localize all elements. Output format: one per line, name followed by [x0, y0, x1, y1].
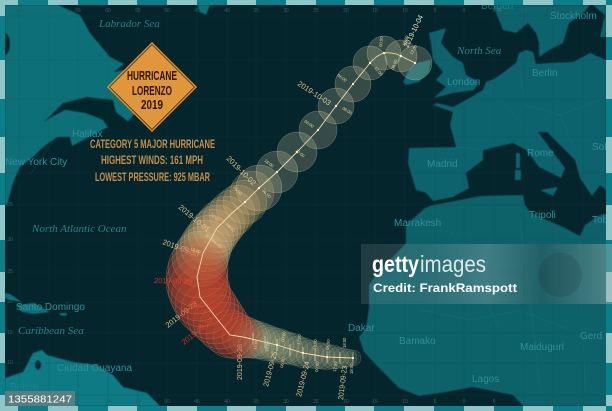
track line — [197, 53, 415, 358]
position time labels: 12:00 — [409, 43, 418, 56]
sea labels: Caribbean Sea — [18, 325, 84, 337]
position time labels: 00:00 — [314, 361, 320, 372]
position time labels: 12:00 — [190, 246, 202, 255]
date labels under circles — [154, 13, 425, 400]
position time labels: 06:00 — [232, 185, 244, 197]
position time labels: 06:00 — [261, 188, 273, 200]
watermark band: images — [420, 251, 486, 277]
warning sign: hurricane name: LORENZO — [132, 83, 172, 98]
city labels: Lagos — [472, 374, 499, 385]
position time labels: 12:00 — [252, 338, 259, 350]
date labels under circles: 2019-10-04 — [402, 13, 425, 49]
sea labels: North Atlantic Ocean — [31, 223, 127, 235]
land: Britain — [429, 28, 479, 98]
position time labels: 12:00 — [296, 334, 302, 345]
image id tag: 1355881247 — [8, 394, 72, 406]
coordinate labels: 40 — [224, 399, 230, 405]
position time labels: 12:00 — [209, 212, 221, 223]
city labels: Dakar — [348, 323, 375, 334]
city labels: Rome — [527, 148, 554, 159]
coordinate labels: 60 — [105, 8, 111, 14]
position time labels: 00:00 — [204, 233, 216, 243]
date labels under circles: 2019-09-27 — [180, 316, 215, 347]
position time labels: 06:00 — [279, 356, 286, 368]
coordinate labels: 20 — [580, 399, 586, 405]
sea labels: North Sea — [456, 45, 502, 57]
position time labels: 06:00 — [390, 58, 399, 70]
coordinate labels: 10 — [521, 399, 527, 405]
position time labels: 18:00 — [401, 34, 410, 46]
watermark band — [361, 244, 612, 304]
storm statistics: LOWEST PRESSURE: 925 MBAR — [95, 172, 210, 184]
date labels under circles: 2019-10-01 — [177, 203, 212, 234]
position time labels: 12:00 — [373, 65, 384, 77]
position time labels: 06:00 — [341, 106, 354, 116]
position time labels: 18:00 — [225, 222, 237, 234]
image id tag — [5, 391, 75, 406]
sea labels: Labrador Sea — [98, 18, 160, 30]
Hudson Bay edge — [0, 33, 10, 55]
position time labels: 00:00 — [378, 36, 384, 47]
coordinate labels: 70 — [46, 8, 52, 14]
storm statistics — [90, 139, 215, 184]
warning sign: hurricane name — [107, 42, 197, 132]
coordinate labels: 35 — [7, 202, 13, 208]
date labels under circles: 2019-10-02 — [225, 154, 258, 187]
storm statistics: HIGHEST WINDS: 161 MPH — [101, 155, 203, 167]
coordinate labels: 25 — [313, 399, 319, 405]
position time labels: 18:00 — [312, 339, 318, 350]
watermark band: getty — [372, 251, 419, 277]
coordinate labels: 0 — [463, 399, 466, 405]
position time labels: 06:00 — [303, 119, 315, 129]
position time labels: 18:00 — [264, 340, 271, 352]
land: Cuba — [5, 293, 22, 302]
track points — [244, 52, 416, 359]
position time labels: 06:00 — [336, 73, 348, 83]
land: North America — [5, 5, 136, 205]
coordinate labels: 45 — [194, 8, 200, 14]
position time labels: 06:00 — [325, 339, 331, 350]
storm statistics: CATEGORY 5 MAJOR HURRICANE — [90, 139, 215, 151]
coordinate labels: 5 — [434, 399, 437, 405]
city labels: Maiduguri — [520, 342, 564, 353]
coordinate labels: 55 — [135, 8, 141, 14]
position time labels: 18:00 — [349, 363, 354, 374]
coordinate labels: 10 — [402, 8, 408, 14]
position time labels: 18:00 — [263, 158, 275, 169]
coordinate labels: 25 — [7, 269, 13, 275]
warning sign: hurricane name: 2019 — [141, 97, 163, 112]
date labels under circles: 2019-09-25 — [261, 350, 279, 388]
coordinate labels: 60 — [105, 399, 111, 405]
city labels: Berlin — [532, 68, 558, 79]
coordinate labels: 45 — [7, 134, 13, 140]
Lake Maracaibo — [35, 360, 41, 370]
warning sign: hurricane name: HURRICANE — [127, 68, 177, 83]
city labels: Gerd — [580, 331, 602, 342]
coordinate labels: 30 — [283, 399, 289, 405]
coordinate labels: 15 — [7, 330, 13, 336]
coordinate labels: 10 — [402, 399, 408, 405]
city labels: London — [447, 77, 480, 88]
coordinate labels: 75 — [16, 8, 22, 14]
coordinate labels: 25 — [313, 8, 319, 14]
city labels: Tripoli — [529, 210, 556, 221]
date labels under circles: 2019-10-03 — [296, 79, 333, 107]
coordinate labels: 10 — [7, 360, 13, 366]
coordinate labels: 40 — [7, 170, 13, 176]
city labels: New York City — [5, 157, 67, 168]
coordinate labels: 30 — [7, 237, 13, 243]
position time labels: 12:00 — [332, 361, 338, 372]
coordinate labels: 40 — [224, 8, 230, 14]
city labels: Ciudad Guayana — [57, 363, 132, 374]
coordinate labels: 15 — [550, 399, 556, 405]
city labels: Madrid — [427, 159, 458, 170]
position time labels: 12:00 — [294, 148, 306, 159]
Gulf of St Lawrence — [43, 97, 133, 128]
coordinate labels: 50 — [7, 96, 13, 102]
land: continental Europe — [408, 5, 606, 201]
date labels under circles: 2019-09-23 — [336, 365, 349, 400]
coordinate labels: 50 — [164, 399, 170, 405]
sea labels — [18, 18, 502, 337]
land: Greenland tip — [197, 5, 210, 15]
coordinate labels: 20 — [7, 299, 13, 305]
position time labels: 00:00 — [280, 330, 287, 342]
land: Ireland — [403, 60, 431, 85]
coordinate labels: 5 — [434, 8, 437, 14]
coordinate labels: 50 — [164, 8, 170, 14]
coordinate labels: 60 — [7, 14, 13, 20]
city labels: Bamako — [399, 336, 436, 347]
coordinate labels: 5 — [493, 8, 496, 14]
land: Scandinavia — [493, 5, 590, 57]
city labels: Belém — [10, 382, 38, 393]
date labels under circles: 2019-09-26 — [235, 344, 244, 380]
position time labels: 18:00 — [342, 337, 347, 348]
coordinate labels: 30 — [283, 8, 289, 14]
coordinate labels: 35 — [253, 399, 259, 405]
land: Africa — [359, 195, 612, 406]
coordinate labels: 20 — [343, 399, 349, 405]
coordinate labels: 55 — [135, 399, 141, 405]
date labels under circles: 2019-09-28 — [164, 299, 199, 330]
position tick marks — [253, 333, 353, 364]
date labels under circles: 2019-09-24 — [294, 360, 312, 397]
position time labels: 06:00 — [211, 239, 223, 249]
coordinate labels: 35 — [253, 8, 259, 14]
hurricane track — [154, 13, 432, 400]
land: South America — [5, 350, 160, 406]
coordinate labels: 20 — [580, 8, 586, 14]
position time labels — [190, 34, 418, 374]
date labels under circles: 2019-09-30 — [161, 237, 200, 259]
watermark band: Credit: FrankRamspott — [373, 281, 517, 295]
city labels: Bergen — [481, 1, 513, 12]
coordinate labels: 15 — [372, 8, 378, 14]
city labels: Halifax — [72, 129, 103, 140]
coordinate labels: 65 — [75, 8, 81, 14]
date labels under circles: 2019-09-29 — [154, 276, 192, 286]
land: Mediterranean islands — [515, 153, 558, 196]
city labels: Stockholm — [550, 11, 597, 22]
coordinate labels: 20 — [343, 8, 349, 14]
coordinate labels: 5 — [493, 399, 496, 405]
country borders — [30, 70, 600, 390]
land: Hispaniola — [16, 303, 67, 316]
coordinate labels: 10 — [521, 8, 527, 14]
coordinate labels: 0 — [463, 8, 466, 14]
coordinate labels: 55 — [7, 57, 13, 63]
coordinate labels: 15 — [550, 8, 556, 14]
coordinate labels: 45 — [194, 399, 200, 405]
coordinate labels: 15 — [372, 399, 378, 405]
wind radius circles — [166, 36, 432, 370]
city labels: Santo Domingo — [16, 302, 85, 313]
city labels: Marrakesh — [394, 218, 441, 229]
